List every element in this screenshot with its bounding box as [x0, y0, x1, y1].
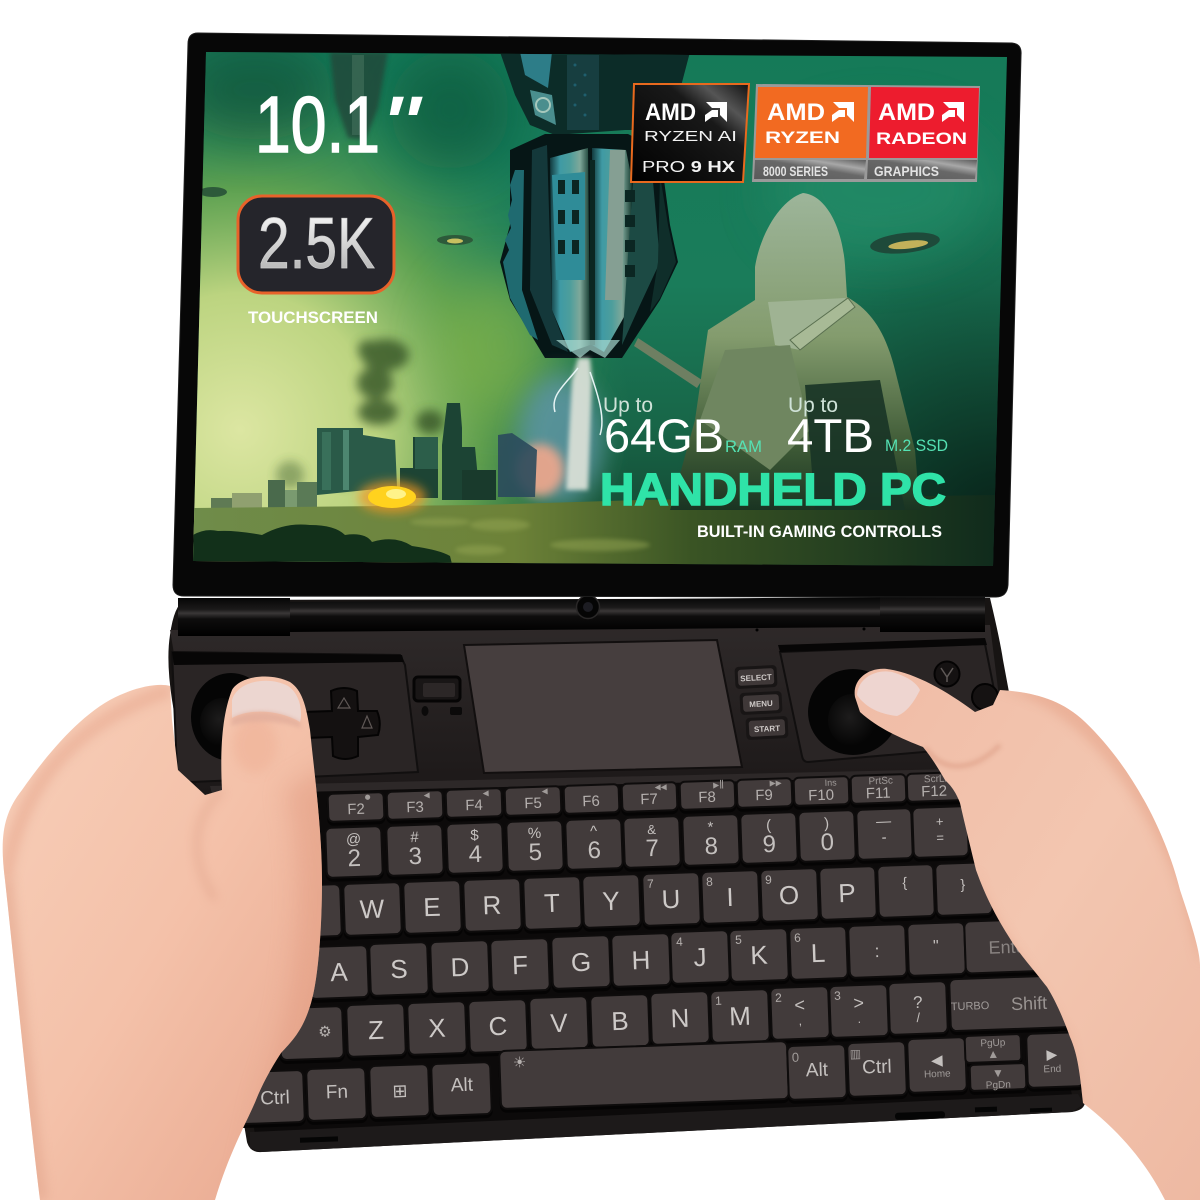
home key row: Enter: [988, 936, 1032, 958]
number key row: 0: [820, 829, 834, 856]
QWERTY key row: 9: [765, 873, 772, 887]
function key row: F9: [755, 787, 773, 804]
bottom letter key row: Shift: [1011, 993, 1047, 1014]
left thumbnail: [232, 681, 301, 722]
mode switch: [414, 677, 462, 716]
space bar row: ◀: [931, 1052, 943, 1069]
rifle: [634, 338, 702, 388]
right thumbnail: [857, 671, 920, 716]
number key row: ): [824, 815, 829, 832]
function key row: F7: [640, 791, 658, 808]
QWERTY key row: I: [726, 882, 734, 912]
home key row: 6: [794, 931, 801, 945]
bottom letter key row: Z: [368, 1015, 385, 1045]
space bar row: Alt: [450, 1075, 474, 1096]
size headline: ": [381, 80, 423, 169]
black AMD badge: AMD: [645, 99, 696, 126]
storage spec: Up to: [788, 394, 838, 417]
space bar row: PgDn: [986, 1080, 1011, 1091]
system buttons: START: [754, 724, 780, 734]
space bar row: ▼: [992, 1066, 1004, 1080]
QWERTY key row: U: [661, 884, 681, 914]
home key row: F: [512, 950, 528, 980]
system buttons: [734, 665, 789, 740]
orange Ryzen badge: RYZEN: [765, 128, 840, 147]
ufos: [199, 187, 941, 257]
function key row: F3: [406, 799, 424, 816]
QWERTY key row: R: [482, 890, 502, 920]
vents and ports: [300, 1107, 1052, 1143]
number key row: 9: [762, 831, 776, 858]
black AMD badge: RYZEN AI: [644, 128, 737, 145]
number key row: @: [346, 831, 361, 848]
storage spec: [788, 398, 948, 452]
home key row: G: [570, 947, 592, 977]
number key row: 2: [347, 845, 361, 872]
bottom letter key row: 1: [715, 994, 722, 1008]
bottom letter key row: C: [488, 1011, 508, 1041]
number key row: +: [936, 814, 944, 829]
right analog stick: [808, 669, 898, 755]
ground: [190, 495, 1000, 570]
function key row: F5: [524, 795, 542, 812]
bottom letter key row: >: [853, 993, 864, 1013]
memory spec: RAM: [725, 437, 762, 456]
icon: AMD arrow: [705, 102, 727, 122]
space bar row: ⊞: [392, 1081, 408, 1101]
function key row: F10: [808, 787, 834, 804]
memory spec: Up to: [603, 394, 653, 417]
city skyline: [211, 403, 537, 518]
function key row: ScrLk: [924, 773, 951, 785]
2.5K badge: [238, 196, 394, 293]
icon: AMD arrow: [942, 102, 964, 122]
space bar row: Ctrl: [260, 1087, 290, 1109]
number key row: 7: [645, 835, 659, 862]
red Radeon badge: AMD: [878, 99, 935, 126]
handheld pc heading: HANDHELD PC: [600, 464, 946, 515]
space bar row: End: [1043, 1064, 1061, 1075]
hooded figure: [670, 193, 920, 510]
2.5K badge: 2.5K: [258, 204, 375, 284]
function key row: F4: [465, 797, 483, 814]
left hand: [3, 676, 340, 1200]
number key row: =: [936, 830, 944, 845]
red Radeon badge: GRAPHICS: [874, 163, 939, 179]
face buttons: [934, 662, 998, 710]
storage spec: 4TB: [787, 409, 874, 462]
space bar row: [236, 1032, 1084, 1124]
memory spec: [604, 398, 761, 452]
system buttons: MENU: [749, 699, 773, 709]
function key row: F6: [582, 793, 600, 810]
bottom letter key row: B: [611, 1006, 629, 1036]
beam: [516, 358, 602, 505]
touchscreen label: TOUCHSCREEN: [248, 308, 378, 327]
QWERTY key row: W: [359, 894, 385, 924]
home key row: D: [450, 952, 470, 982]
space bar row: ▲: [987, 1047, 999, 1061]
number key row: [325, 806, 969, 878]
orange Ryzen badge: [752, 84, 980, 182]
space bar row: ▥: [850, 1047, 861, 1061]
number key row: (: [766, 817, 771, 834]
red Radeon badge: [867, 87, 979, 179]
bottom letter key row: V: [550, 1008, 569, 1038]
space bar row: Fn: [325, 1082, 348, 1103]
function key row: [327, 772, 962, 822]
number key row: 8: [704, 833, 718, 860]
black AMD badge: [631, 84, 749, 182]
function key row: PrtSc: [868, 775, 893, 787]
hinge: [178, 594, 985, 636]
left control panel: [172, 652, 418, 782]
number key row: ^: [590, 823, 597, 840]
QWERTY key row: {: [902, 874, 908, 890]
d-pad: [303, 688, 380, 759]
home key row: K: [750, 940, 769, 970]
space bar row: 0: [792, 1050, 799, 1065]
number key row: -: [881, 829, 887, 846]
smoke: [276, 339, 444, 489]
home key row: J: [693, 942, 707, 972]
function key row: F12: [921, 783, 947, 800]
space bar row: ☀: [512, 1054, 527, 1072]
home key row: H: [631, 945, 651, 975]
home key row: A: [330, 957, 349, 987]
home key row: 4: [676, 935, 683, 949]
bottom letter key row: TURBO: [951, 1000, 990, 1013]
function key row: ●: [364, 789, 372, 804]
home key row: [308, 918, 1056, 999]
number key row: #: [410, 829, 420, 846]
function key row: F2: [347, 801, 365, 818]
QWERTY key row: 8: [706, 875, 713, 889]
explosion: [358, 481, 426, 513]
number key row: $: [470, 827, 480, 844]
bottom letter key row: <: [794, 995, 805, 1015]
orange Ryzen badge: AMD: [767, 99, 825, 126]
QWERTY key row: }: [960, 876, 966, 892]
function key row: F8: [698, 789, 716, 806]
number key row: *: [707, 819, 714, 836]
size headline: 10.1: [255, 80, 380, 169]
number key row: 6: [587, 837, 601, 864]
space bar row: ▶: [1046, 1046, 1058, 1062]
number key row: &: [647, 822, 656, 837]
right control panel: [756, 628, 1005, 762]
function key row: ◂: [541, 783, 548, 798]
black AMD badge: PRO 9 HX: [642, 159, 735, 176]
keyboard: [204, 768, 1084, 1152]
foreground trees: [190, 524, 452, 564]
touchpad: [464, 640, 742, 773]
space bar row: Home: [924, 1069, 951, 1080]
number key row: 4: [468, 841, 482, 868]
laptop base: [168, 598, 1085, 1152]
QWERTY key row: Y: [602, 886, 620, 916]
bottom letter key row: X: [428, 1013, 446, 1043]
function key row: ◂: [423, 787, 430, 802]
space bar row: Alt: [805, 1060, 829, 1081]
distant ship: [330, 52, 388, 140]
QWERTY key row: [282, 862, 993, 938]
function key row: F11: [866, 785, 891, 802]
laptop lid bezel: [173, 33, 1021, 597]
QWERTY key row: T: [544, 888, 561, 918]
bottom letter key row: ?: [913, 993, 923, 1012]
icon: AMD arrow: [832, 102, 854, 122]
number key row: 5: [528, 839, 542, 866]
right hand: [855, 669, 1200, 1200]
function key row: ▸‖: [713, 777, 724, 792]
screen wallpaper: [175, 40, 1010, 570]
red Radeon badge: RADEON: [876, 129, 967, 148]
bottom letter key row: N: [670, 1003, 690, 1033]
orange Ryzen badge: 8000 SERIES: [763, 163, 828, 179]
home key row: S: [390, 954, 408, 984]
spaceship: [500, 52, 690, 358]
function key row: ◂◂: [654, 779, 667, 794]
left analog stick: [191, 673, 271, 761]
home key row: ": [933, 938, 939, 955]
function key row: ▸▸: [769, 775, 782, 790]
space bar row: PgUp: [980, 1038, 1006, 1049]
QWERTY key row: O: [778, 880, 800, 910]
controls tagline: BUILT-IN GAMING CONTROLLS: [697, 522, 942, 541]
QWERTY key row: E: [423, 892, 441, 922]
function key row: ◂: [482, 785, 489, 800]
home key row: 5: [735, 933, 742, 947]
bottom letter key row: 2: [775, 991, 782, 1005]
QWERTY key row: 7: [647, 877, 654, 891]
home key row: L: [810, 938, 826, 968]
webcam: [576, 596, 600, 618]
system buttons: SELECT: [740, 673, 772, 683]
function key row: Ins: [825, 777, 837, 788]
bottom letter key row: /: [916, 1010, 921, 1025]
space bar row: Ctrl: [862, 1056, 892, 1079]
control deck: [170, 625, 1010, 795]
memory spec: 64GB: [604, 409, 724, 462]
bottom letter key row: M: [729, 1001, 751, 1031]
bottom letter key row: 3: [834, 989, 841, 1003]
number key row: 3: [408, 843, 422, 870]
storage spec: M.2 SSD: [885, 436, 948, 455]
size headline: [259, 96, 423, 154]
number key row: —: [876, 813, 891, 830]
QWERTY key row: P: [838, 878, 856, 908]
bottom letter key row: ,: [798, 1014, 802, 1028]
bottom letter key row: .: [857, 1012, 861, 1026]
bottom letter key row: ⚙: [318, 1023, 332, 1041]
number key row: %: [528, 825, 542, 842]
home key row: :: [874, 941, 880, 961]
bottom letter key row: [279, 975, 1081, 1060]
